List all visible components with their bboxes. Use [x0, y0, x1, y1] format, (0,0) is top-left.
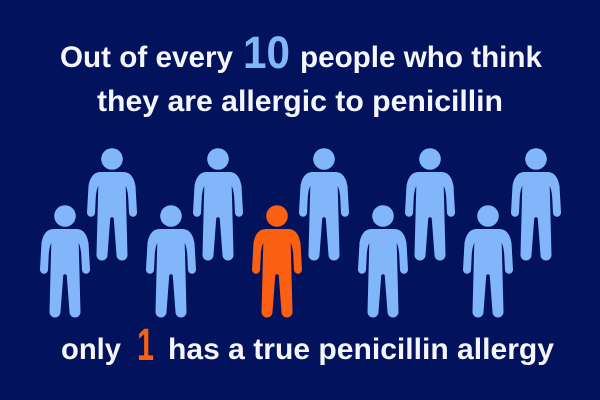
heading line 1	[60, 27, 542, 78]
conclusion line: has a true penicillin allergy	[168, 333, 554, 366]
number 1: 1	[137, 319, 154, 370]
conclusion line: only	[61, 333, 121, 366]
person 5: true allergy	[252, 205, 302, 318]
person 1	[40, 205, 90, 318]
people row	[40, 148, 561, 318]
person 4	[193, 148, 243, 260]
person 7	[358, 205, 408, 318]
person 2	[87, 148, 137, 260]
number 10: 10	[243, 27, 290, 78]
person 6	[299, 148, 349, 260]
conclusion line	[61, 319, 554, 370]
person 9	[463, 205, 513, 318]
person 8	[405, 148, 455, 260]
person 10	[511, 148, 561, 260]
person 3	[146, 205, 196, 318]
heading line 2: they are allergic to penicillin	[97, 85, 503, 118]
heading line 1: Out of every	[60, 41, 233, 74]
heading line 1: people who think	[300, 41, 542, 74]
